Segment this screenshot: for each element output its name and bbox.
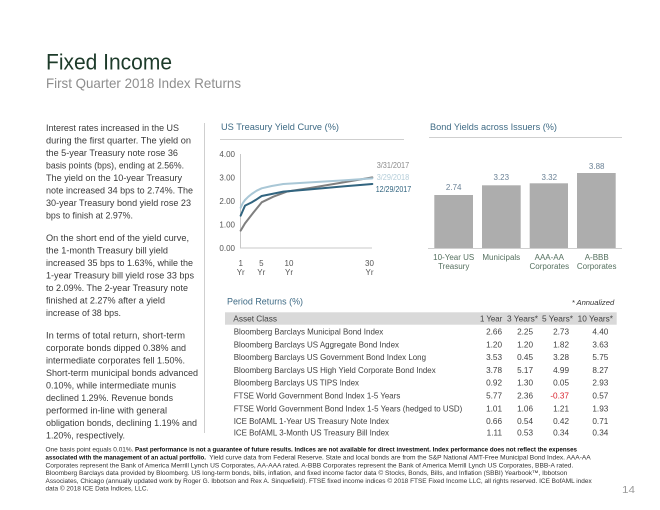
y axis labels	[219, 150, 236, 253]
text block: commentary paragraph 1: the 5-year Treasury note rose 36	[46, 148, 178, 159]
note: annualized: * Annualized	[572, 298, 615, 307]
bar value labels: 3.32	[542, 173, 558, 182]
text block: commentary paragraph 3: obligation bonds, declining 1.19% and	[46, 418, 197, 429]
heading: period returns: Period Returns (%)	[227, 297, 303, 307]
table row: municipal	[234, 328, 609, 337]
table row: aggregate: 3.63	[592, 340, 609, 349]
table row: FTSE world hedged: 1.21	[553, 404, 569, 413]
footnote: Bloomberg Barclays data provided by Bloomberg. US long-term bonds, bills, inflation, and fixed income factor data © Stocks, Bonds, Bills, and Inflation (SBBI) Yearbook™, Ibbotson	[46, 469, 568, 477]
table row: high yield: 8.27	[592, 366, 609, 375]
table row: government long: 3.53	[486, 353, 502, 362]
table row: FTSE world hedged	[234, 404, 609, 413]
x axis labels: 1	[238, 259, 243, 268]
table header: 10 Years*	[578, 314, 614, 323]
x axis labels: 10	[285, 259, 294, 268]
y axis labels: 1.00	[219, 220, 236, 230]
table row: high yield: 4.99	[553, 366, 569, 375]
table row: FTSE world hedged: 1.06	[517, 404, 533, 413]
table row: aggregate	[234, 340, 609, 349]
footnote: associated with the management of an actual portfolio.	[46, 454, 206, 462]
bar chart	[434, 173, 616, 248]
table row: ICE 1-year	[234, 417, 609, 426]
table row: TIPS: 0.92	[486, 379, 502, 388]
footnote: One basis point equals 0.01%.	[46, 447, 134, 454]
table row: TIPS: 2.93	[592, 379, 609, 388]
text block: commentary paragraph 1	[46, 123, 193, 222]
x axis labels: 30	[365, 259, 374, 268]
table row: high yield: 5.17	[517, 366, 533, 375]
bar category labels: Corporates	[577, 262, 616, 271]
bar category labels: Treasury	[438, 262, 469, 271]
table row: high yield	[234, 366, 609, 375]
text block: commentary paragraph 1: 30-year Treasury bond yield rose 23	[46, 198, 191, 209]
text block: commentary paragraph 3: declined 1.29%. Revenue bonds	[46, 393, 173, 404]
footnote: Associates, Chicago (annually updated work by Roger G. Ibbotson and Rex A. Sinquefield). FTSE fixed income indices © 2018 FTSE Fixed Income LLC, all rights reserved. ICE BofAML index	[46, 477, 592, 485]
text block: commentary paragraph 1: Interest rates increased in the US	[46, 123, 179, 134]
text block: commentary paragraph 3: In terms of total return, short-term	[46, 330, 185, 342]
panel: bond yields across issuers	[428, 122, 622, 271]
text block: commentary paragraph 2: On the short end of the yield curve,	[46, 233, 189, 244]
footnote: Yield curve data from Federal Reserve. State and local bonds are from the S&P National AMT-Free Municipal Bond Index. AAA-AA	[209, 454, 591, 462]
table row: ICE 1-year: ICE BofAML 1-Year US Treasury Note Index	[234, 417, 389, 426]
bar value labels: 3.23	[494, 173, 510, 182]
table row: ICE 1-year: 0.66	[486, 417, 502, 426]
table row: government long: 5.75	[592, 353, 609, 362]
table row: FTSE world: FTSE World Government Bond Index 1-5 Years	[234, 391, 400, 400]
x axis labels: Yr	[237, 268, 245, 277]
bar category labels: Corporates	[530, 262, 569, 271]
bar category labels	[433, 253, 616, 271]
legend: series labels: 12/29/2017	[376, 185, 412, 194]
line: 3/29/2018 curve	[241, 178, 372, 208]
table row: ICE 3-month: 0.53	[517, 428, 533, 437]
table row: aggregate: 1.82	[553, 340, 569, 349]
table row: government long: Bloomberg Barclays US Government Bond Index Long	[234, 353, 426, 362]
x axis labels: Yr	[366, 268, 374, 277]
table row: TIPS: 0.05	[553, 379, 569, 388]
table row: aggregate: 1.20	[486, 340, 502, 349]
page number: 14	[622, 485, 636, 496]
table row: municipal: 4.40	[592, 328, 609, 337]
table header: 5 Years*	[542, 314, 574, 323]
table row: FTSE world: 0.57	[592, 391, 609, 400]
line: 12/29/2017 curve	[241, 184, 372, 216]
table row: government long	[234, 353, 609, 362]
text block: commentary paragraph 2: finished at 2.27% after a yield	[46, 296, 165, 306]
text block: commentary paragraph 1: bps to finish at 2.97%.	[46, 210, 133, 222]
table row: aggregate: 1.20	[517, 340, 533, 349]
text block: commentary paragraph 3: performed in-line with general	[46, 406, 167, 416]
text block: commentary paragraph 3: intermediate corporates fell 1.50%.	[46, 356, 185, 366]
bar value labels	[446, 162, 605, 192]
text block: commentary paragraph 2: increase of 38 bps.	[46, 308, 121, 319]
table row: aggregate: Bloomberg Barclays US Aggregate Bond Index	[234, 340, 399, 349]
table row: high yield: Bloomberg Barclays US High Yield Corporate Bond Index	[234, 366, 436, 375]
bar value labels: 3.88	[589, 162, 605, 171]
y axis labels: 0.00	[219, 244, 236, 253]
y axis labels: 3.00	[219, 174, 236, 182]
table header: Asset Class	[233, 314, 277, 323]
table row: municipal: 2.66	[486, 328, 502, 337]
bar category labels: Municipals	[482, 253, 520, 262]
footnote: Past performance is not a guarantee of future results. Indices are not available for direct investment. Index performance does not reflect the expenses	[135, 447, 577, 454]
text block: commentary paragraph 1: note increased 34 bps to 2.74%. The	[46, 186, 193, 196]
footnote: data © 2018 ICE Data Indices, LLC.	[46, 485, 148, 493]
text block: commentary paragraph 3: 1.20%, respectively.	[46, 430, 125, 442]
table row: ICE 3-month: ICE BofAML 3-Month US Treasury Bill Index	[234, 428, 389, 437]
table row: FTSE world hedged: 1.93	[592, 404, 609, 413]
panel: US Treasury yield curve	[219, 122, 412, 277]
table row: ICE 3-month: 0.34	[553, 428, 569, 437]
table row: government long: 0.45	[517, 353, 533, 362]
table row: ICE 1-year: 0.71	[592, 417, 609, 426]
table row: TIPS: 1.30	[517, 379, 533, 388]
table row: FTSE world: -0.37	[550, 391, 569, 400]
x axis labels	[237, 259, 374, 277]
table row: TIPS: Bloomberg Barclays US TIPS Index	[234, 379, 359, 388]
text block: commentary paragraph 2: to 2.09%. The 2-year Treasury note	[46, 283, 188, 294]
table row: ICE 3-month: 1.11	[487, 428, 502, 437]
heading: bond yields: Bond Yields across Issuers (%)	[430, 122, 557, 132]
text block: commentary paragraph 1: The yield on the 10-year Treasury	[46, 173, 182, 184]
legend: series labels: 3/29/2018	[377, 173, 410, 182]
text block: commentary paragraph 2	[46, 233, 194, 319]
x axis labels: Yr	[285, 268, 293, 277]
table header	[225, 312, 617, 325]
table row: ICE 1-year: 0.42	[553, 417, 569, 426]
table row: FTSE world hedged: 1.01	[486, 404, 502, 413]
x axis labels: Yr	[257, 268, 266, 277]
y axis labels: 2.00	[219, 197, 236, 206]
bar category labels: A-BBB	[585, 253, 609, 262]
line: 3/31/2017 curve	[241, 177, 372, 231]
table row: municipal: 2.73	[553, 328, 569, 337]
table header: 1 Year	[480, 314, 503, 323]
table row: FTSE world: 2.36	[517, 391, 533, 400]
text block: commentary paragraph 2: 1-year Treasury bill yield rose 33 bps	[46, 270, 194, 282]
text block: commentary paragraph 1: during the first quarter. The yield on	[46, 136, 191, 146]
bar category labels: 10-Year US	[433, 253, 474, 262]
x axis labels: 5	[259, 259, 264, 268]
panel: period returns table	[225, 297, 617, 437]
footnote: Corporates represent the Bank of America Merrill Lynch US Corporates, AA-AAA rated. A-BBB Corporates represent the Bank of America Merrill Lynch US Corporates, BBB-A rated.	[46, 462, 573, 469]
text block: commentary paragraph 3: Short-term municipal bonds advanced	[46, 368, 198, 379]
title: Fixed Income	[46, 50, 172, 74]
bar value labels: 2.74	[446, 183, 462, 192]
text block: commentary paragraph 2: increased 35 bps to 1.63%, while the	[46, 258, 193, 269]
table row: FTSE world	[234, 391, 609, 400]
table row: government long: 3.28	[553, 353, 569, 362]
table row: high yield: 3.78	[486, 366, 502, 375]
table header: 3 Years*	[507, 314, 539, 323]
table row: ICE 3-month	[234, 428, 609, 437]
text block: commentary paragraph 2: the 1-month Treasury bill yield	[46, 246, 168, 256]
table row: FTSE world hedged: FTSE World Government Bond Index 1-5 Years (hedged to USD)	[234, 404, 463, 413]
table row: municipal: 2.25	[517, 328, 533, 337]
table row: ICE 1-year: 0.54	[517, 417, 533, 426]
text block: commentary paragraph 3	[46, 330, 198, 442]
y axis labels: 4.00	[219, 150, 236, 159]
table row: TIPS	[234, 379, 609, 388]
legend: series labels: 3/31/2017	[377, 161, 410, 170]
table row: municipal: Bloomberg Barclays Municipal Bond Index	[234, 328, 383, 337]
bar category labels: AAA-AA	[535, 253, 565, 262]
subtitle: First Quarter 2018 Index Returns	[46, 75, 241, 91]
text block: commentary paragraph 1: basis points (bps), ending at 2.56%.	[46, 160, 184, 172]
text block: commentary paragraph 3: corporate bonds dipped 0.38% and	[46, 343, 186, 354]
footnote	[46, 447, 592, 493]
legend: series labels	[376, 161, 412, 194]
table row: FTSE world: 5.77	[486, 391, 502, 400]
text block: commentary paragraph 3: 0.10%, while intermediate munis	[46, 380, 176, 392]
table row: ICE 3-month: 0.34	[592, 428, 609, 437]
heading: yield curve: US Treasury Yield Curve (%)	[221, 122, 339, 132]
